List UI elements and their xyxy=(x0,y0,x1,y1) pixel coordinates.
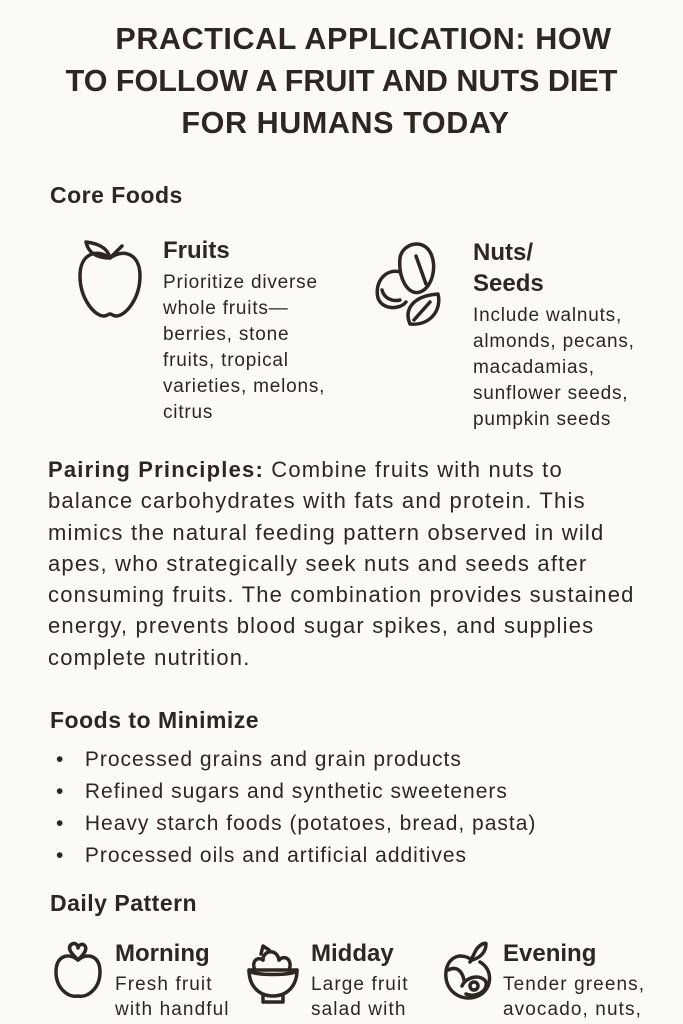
icon: avocado and greens xyxy=(444,942,492,1000)
text: evening body xyxy=(503,974,645,1020)
list: foods to minimize: • Processed oils and artificial additives xyxy=(56,844,467,867)
text block: pairing principles: balance carbohydrates with fats and protein. This xyxy=(48,488,586,513)
text: fruits body xyxy=(163,272,325,423)
label: nuts/seeds: Seeds xyxy=(473,270,544,297)
panel: morning xyxy=(54,940,230,1020)
label: nuts/seeds: Nuts/ xyxy=(473,239,533,266)
text: fruits body: fruits, tropical xyxy=(163,350,289,371)
text: morning body: Fresh fruit xyxy=(115,974,213,995)
text: midday body xyxy=(311,974,409,1020)
text: nuts body: pumpkin seeds xyxy=(473,409,611,430)
label: nuts/seeds xyxy=(473,239,544,297)
icon: fruit bowl xyxy=(247,944,299,1004)
label: morning: Morning xyxy=(115,940,210,967)
text block: pairing principles: consuming fruits. The combination provides sustained xyxy=(48,582,635,607)
heading: foods to minimize: Foods to Minimize xyxy=(50,707,259,733)
text: fruits body: varieties, melons, xyxy=(163,376,325,397)
text: fruits body: whole fruits— xyxy=(163,298,288,319)
text block: pairing principles: Pairing Principles: Combine fruits with nuts to xyxy=(48,457,563,482)
text: evening body: avocado, nuts, xyxy=(503,999,642,1020)
text block: pairing principles: apes, who strategically seek nuts and seeds after xyxy=(48,551,587,576)
text: nuts body: sunflower seeds, xyxy=(473,383,628,404)
heading: core foods: Core Foods xyxy=(50,182,183,208)
text block: pairing principles: complete nutrition. xyxy=(48,645,251,670)
heading: daily pattern: Daily Pattern xyxy=(50,890,197,916)
panel: midday xyxy=(247,940,409,1020)
icon: nuts xyxy=(375,242,440,326)
icon: apple xyxy=(78,240,142,318)
list: foods to minimize: • Refined sugars and synthetic sweeteners xyxy=(56,780,508,803)
panel: evening xyxy=(444,940,645,1020)
text: nuts body: Include walnuts, xyxy=(473,305,622,326)
text block: pairing principles: mimics the natural feeding pattern observed in wild xyxy=(48,520,604,545)
text: morning body xyxy=(115,974,230,1020)
text: fruits body: berries, stone xyxy=(163,324,289,345)
text: nuts body xyxy=(473,305,635,430)
label: fruits: Fruits xyxy=(163,237,230,264)
text: TO FOLLOW A FRUIT AND NUTS DIET xyxy=(66,64,617,98)
title xyxy=(66,22,618,140)
label: evening: Evening xyxy=(503,940,596,967)
panel: fruits xyxy=(78,237,325,423)
text: morning body: with handful xyxy=(115,999,230,1020)
label: midday: Midday xyxy=(311,940,394,967)
list: foods to minimize: • Processed grains and grain products xyxy=(56,748,462,771)
text: fruits body: citrus xyxy=(163,402,213,423)
list: foods to minimize xyxy=(56,748,536,867)
list: foods to minimize: • Heavy starch foods (potatoes, bread, pasta) xyxy=(56,812,536,835)
text: PRACTICAL APPLICATION: HOW xyxy=(115,22,612,56)
panel: nuts/seeds xyxy=(375,239,635,430)
text: midday body: Large fruit xyxy=(311,974,409,995)
text: FOR HUMANS TODAY xyxy=(181,106,510,140)
text: midday body: salad with xyxy=(311,999,406,1020)
text: evening body: Tender greens, xyxy=(503,974,645,995)
text: nuts body: almonds, pecans, xyxy=(473,331,635,352)
icon: apple heart xyxy=(54,942,102,998)
text: nuts body: macadamias, xyxy=(473,357,595,378)
text: fruits body: Prioritize diverse xyxy=(163,272,318,293)
text block: pairing principles: energy, prevents blood sugar spikes, and supplies xyxy=(48,613,594,638)
text block: pairing principles xyxy=(48,457,635,670)
